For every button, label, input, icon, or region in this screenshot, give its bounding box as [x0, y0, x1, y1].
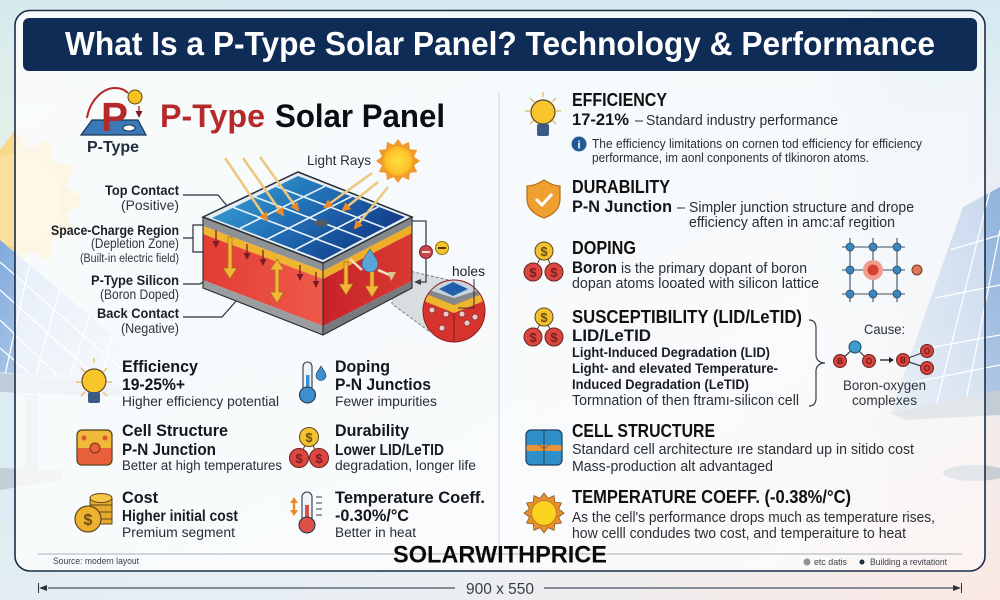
stat: durability: Lower LID/LeTID	[335, 442, 444, 459]
note with info icon	[572, 136, 923, 165]
icon: red thermometer	[290, 492, 322, 533]
stat: doping: Doping	[335, 358, 390, 376]
section: efficiency: 17-21%	[572, 111, 629, 129]
chart: silicon lattice with boron atom	[842, 238, 922, 302]
section: temperature coefficient	[524, 487, 935, 542]
note with info icon: The efficiency limitations on cornen tod efficiency for efficiency	[592, 137, 923, 151]
icon: shield	[527, 180, 560, 218]
divider labels: cell layer callouts: (Built-in electric field)	[80, 253, 179, 265]
section: susceptibility	[524, 307, 934, 409]
chart: P-type cell cross-section diagram	[203, 139, 485, 345]
icon: coin trio: $	[540, 310, 548, 325]
divider labels: cell layer callouts: P-Type Silicon	[91, 272, 179, 288]
section: doping: DOPING	[572, 238, 636, 258]
divider labels: cell layer callouts: (Negative)	[121, 320, 179, 336]
icon: cell junction	[77, 430, 112, 465]
panel: left column	[51, 88, 485, 540]
icon: coin trio: $	[550, 265, 558, 280]
small electric field arrows	[216, 230, 316, 286]
note with info icon: performance, im aonl conponents of tlkinoron atoms.	[592, 151, 869, 165]
section: temperature coefficient: how celll condudes two cost, and temperaiture to heat	[572, 526, 906, 542]
icon: blue cell	[526, 430, 562, 465]
section: susceptibility: LID/LeTID	[572, 327, 651, 345]
stat: cell structure: Better at high temperatures	[122, 458, 282, 473]
stat: cell structure: P-N Junction	[122, 441, 216, 459]
section: durability: P-N Junction	[572, 198, 672, 216]
section: cell structure	[526, 421, 914, 475]
icon: P-type logo	[81, 88, 146, 156]
icon: coin trio	[524, 308, 563, 346]
stat: temperature coefficient	[290, 489, 485, 540]
icon: sun with light rays label: Light Rays	[307, 152, 371, 168]
stat: temperature coefficient: Temperature Coeff.	[335, 489, 485, 507]
section: efficiency	[525, 90, 923, 165]
stat: doping: P-N Junctios	[335, 376, 431, 394]
section: doping: dopan atoms looated with silicon lattice	[572, 276, 819, 292]
section: durability: Simpler junction structure and drope	[689, 200, 914, 216]
divider labels: cell layer callouts: Space-Charge Region	[51, 222, 179, 238]
dimension line: 900 x 550	[38, 581, 962, 598]
divider labels: cell layer callouts: Top Contact	[105, 182, 179, 198]
stat: doping	[300, 358, 437, 409]
stat: cell structure	[77, 422, 282, 473]
diagram: boron-oxygen complexes: O	[924, 347, 930, 356]
section: susceptibility: Induced Degradation (LeTID)	[572, 376, 749, 392]
section: efficiency: Standard industry performance	[646, 113, 838, 129]
section: susceptibility: Light-Induced Degradation (LID)	[572, 344, 770, 360]
diagram: boron-oxygen complexes: Cause:	[864, 321, 905, 337]
diagram: boron-oxygen complexes: B	[837, 357, 843, 366]
icon: coin trio: $	[295, 451, 303, 466]
footer: legend: Building a revitationt	[870, 557, 947, 567]
section: doping: Boron	[572, 259, 617, 277]
water droplet and junction markers	[350, 249, 396, 281]
title banner: What Is a P-Type Solar Panel? Technology & Performance	[65, 25, 935, 62]
icon: sun with light rays label	[307, 139, 420, 183]
external circuit	[412, 221, 448, 285]
section: temperature coefficient: TEMPERATURE COEFF. (-0.38%/°C)	[572, 487, 851, 507]
stat: temperature coefficient: Better in heat	[335, 525, 416, 540]
block: right face layers	[203, 217, 412, 335]
icon: coin stack: $	[84, 512, 93, 529]
section: temperature coefficient: As the cell's performance drops much as temperature rises,	[572, 510, 935, 526]
icon: coin trio: $	[529, 265, 537, 280]
icon: P-type logo: P-Type	[87, 139, 139, 156]
divider labels: cell layer callouts	[51, 182, 237, 336]
section: cell structure: CELL STRUCTURE	[572, 421, 715, 441]
section: susceptibility: Tormnation of then ftramı-silicon cell	[572, 393, 799, 409]
section: efficiency: EFFICIENCY	[572, 90, 667, 110]
section: durability: efficiency aften in amc:af regition	[689, 215, 895, 231]
stat: cell structure: Cell Structure	[122, 422, 228, 440]
diagram: boron-oxygen complexes: Boron-oxygen	[843, 377, 926, 393]
diagram: boron-oxygen complexes: complexes	[852, 392, 917, 408]
icon: coin trio	[524, 242, 563, 281]
footer: legend	[804, 557, 947, 567]
stat: durability: degradation, longer life	[335, 458, 476, 473]
icon: coin trio: $	[305, 430, 313, 445]
section: cell structure: Standard cell architecture ıre standard up in sitido cost	[572, 442, 914, 458]
note with info icon: i	[577, 140, 581, 152]
stat: cost: Higher initial cost	[122, 508, 238, 525]
callout: magnified holes: holes	[452, 263, 485, 279]
icon: blue thermometer and drop	[300, 362, 326, 403]
light rays	[225, 157, 388, 228]
section: durability: –	[677, 200, 686, 216]
section: susceptibility: Light- and elevated Temperature-	[572, 360, 778, 376]
stat: efficiency: Efficiency	[122, 358, 199, 376]
stat: cost: Premium segment	[122, 525, 235, 540]
footer: source note: Source: modern layout	[53, 556, 139, 566]
stat: durability	[290, 422, 476, 473]
stat: efficiency	[76, 358, 279, 409]
diagram: boron-oxygen complexes	[834, 321, 934, 408]
heading: P-Type Solar Panel: Solar Panel	[275, 98, 445, 134]
section: doping: is the primary dopant of boron	[621, 261, 807, 277]
section: durability	[527, 177, 914, 231]
stat: temperature coefficient: -0.30%/°C	[335, 507, 409, 525]
divider labels: cell layer callouts: Back Contact	[97, 305, 179, 321]
divider labels: cell layer callouts: (Depletion Zone)	[91, 235, 179, 251]
icon: P-type logo: P	[101, 94, 128, 140]
block: top solar cells	[203, 172, 412, 263]
icon: coin trio: $	[529, 330, 537, 345]
divider labels: cell layer callouts: (Boron Doped)	[100, 286, 179, 302]
stat: cost: Cost	[122, 489, 158, 507]
title banner	[23, 18, 977, 71]
diagram: boron-oxygen complexes: O	[924, 364, 930, 373]
section: durability: DURABILITY	[572, 177, 670, 197]
section: efficiency: –	[635, 113, 644, 129]
diagram: boron-oxygen complexes: B	[900, 356, 906, 365]
icon: coin trio: $	[540, 244, 548, 259]
stat: cost	[75, 489, 238, 540]
heading: P-Type Solar Panel: P-Type	[160, 98, 265, 134]
magnifier funnel	[392, 267, 453, 332]
section: doping	[524, 238, 922, 302]
icon: light bulb	[525, 92, 561, 136]
block: left face layers	[203, 217, 323, 335]
icon: coin stack	[75, 494, 112, 532]
dimension line: 900 x 550: 900 x 550	[466, 581, 534, 598]
stat: efficiency: 19-25%+	[122, 376, 185, 394]
diagram: boron-oxygen complexes: O	[866, 357, 872, 366]
icon: coin trio: $	[315, 451, 323, 466]
footer: legend: etc datis	[814, 557, 847, 567]
icon: sun	[524, 493, 564, 533]
callout: magnified holes	[423, 263, 485, 345]
charge carrier arrows	[223, 237, 379, 303]
heading: P-Type Solar Panel	[81, 88, 445, 156]
stat: doping: Fewer impurities	[335, 394, 437, 409]
section: susceptibility: SUSCEPTIBILITY (LID/LeTID)	[572, 307, 802, 327]
panel: right column	[524, 90, 935, 542]
stat: durability: Durability	[335, 422, 410, 440]
divider labels: cell layer callouts: (Positive)	[121, 197, 179, 213]
watermark: SOLARWITHPRICE: SOLARWITHPRICE	[393, 542, 607, 568]
icon: coin trio	[290, 428, 328, 468]
icon: light bulb	[76, 358, 112, 403]
section: cell structure: Mass-production alt advantaged	[572, 459, 773, 475]
icon: coin trio: $	[550, 330, 558, 345]
stat: efficiency: Higher efficiency potential	[122, 394, 279, 409]
